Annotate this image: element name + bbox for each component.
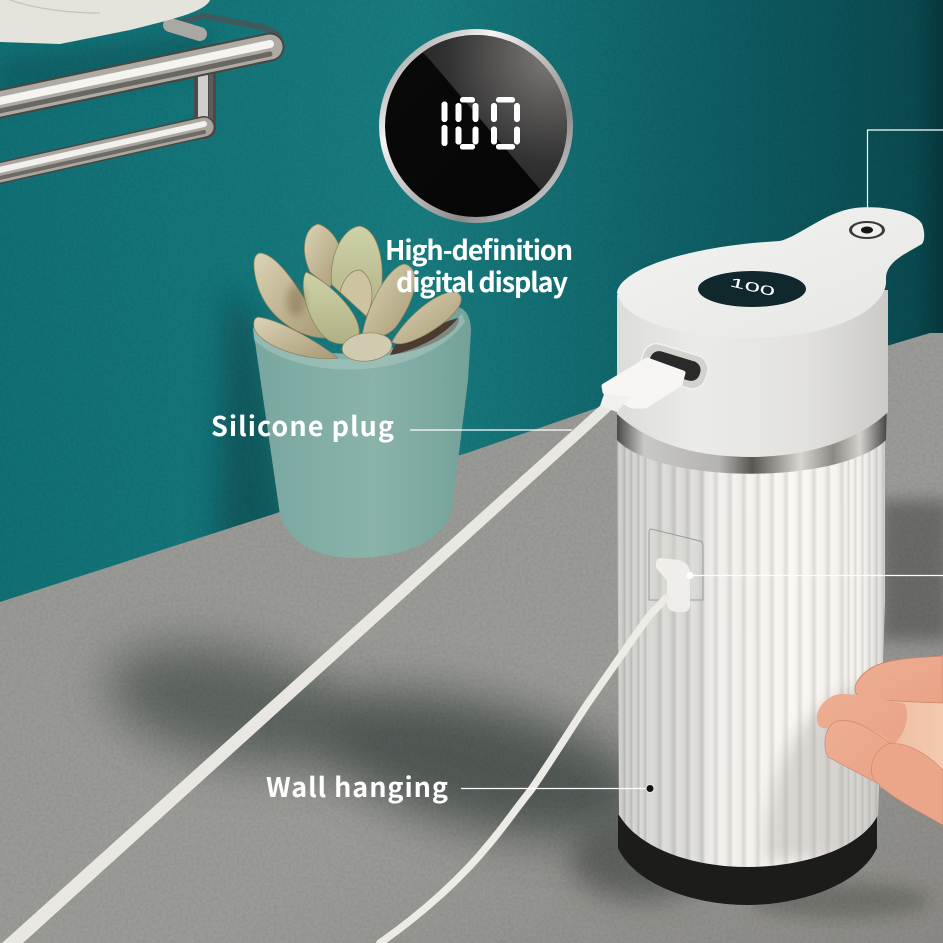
display badge bbox=[379, 29, 573, 223]
ribbed body bbox=[610, 430, 890, 870]
counter top bbox=[0, 333, 943, 943]
sensor ring bbox=[849, 221, 885, 239]
top display bbox=[698, 271, 806, 307]
soil bbox=[390, 318, 459, 355]
second finger bbox=[817, 694, 907, 745]
wall hook bbox=[658, 560, 688, 610]
floor shadow right of base bbox=[750, 882, 930, 918]
head top surface bbox=[617, 207, 924, 338]
hand bbox=[817, 655, 943, 825]
leaf: low left bbox=[254, 317, 338, 359]
black glass bbox=[385, 35, 567, 217]
top display: 100 bbox=[728, 274, 777, 299]
wall bbox=[0, 0, 943, 610]
dispenser bbox=[600, 207, 924, 905]
back bar bbox=[165, 16, 280, 40]
charging port bbox=[637, 340, 711, 392]
label: wall hanging bbox=[266, 766, 654, 805]
label: display: digital display bbox=[396, 261, 568, 300]
right counter shade bbox=[880, 500, 943, 640]
back stub bbox=[170, 25, 200, 34]
label: silicone plug: Silicone plug bbox=[211, 405, 394, 444]
leaf: front bbox=[303, 272, 359, 344]
pot shadow on wall bbox=[215, 285, 290, 560]
main cable bbox=[2, 404, 618, 943]
bracket bbox=[203, 70, 211, 128]
label: wall hanging: Wall hanging bbox=[266, 766, 448, 805]
pot bbox=[253, 307, 471, 558]
plug strain relief bbox=[600, 394, 630, 412]
callout: hook line bbox=[686, 572, 943, 579]
top finger bbox=[855, 656, 943, 703]
leaf: small centre bbox=[340, 270, 372, 316]
marker dot bbox=[646, 784, 654, 792]
leaf: back left bbox=[304, 224, 341, 287]
towel fold bbox=[10, 0, 100, 13]
second cable bbox=[380, 598, 666, 943]
wall hanging panel bbox=[649, 529, 703, 600]
leaf: centre green bbox=[331, 226, 382, 318]
towel bbox=[0, 0, 210, 44]
wall shadow of rail bbox=[0, 30, 210, 110]
leaf: pebble bbox=[341, 330, 393, 364]
metal bezel bbox=[379, 29, 573, 223]
reading: 100 bbox=[422, 82, 526, 166]
label: display: High-definition bbox=[385, 229, 573, 268]
label: display bbox=[385, 229, 573, 300]
lower bar bbox=[0, 124, 204, 179]
leaf: upper right bbox=[362, 264, 415, 338]
leaf: left bbox=[254, 253, 325, 338]
black base bbox=[618, 815, 877, 905]
towel rail bbox=[0, 16, 280, 179]
leader line bbox=[410, 429, 572, 431]
dispenser floor shadow left lobe bbox=[96, 625, 364, 785]
callout: sensor line bbox=[868, 130, 943, 208]
leaf shadow bbox=[287, 284, 305, 316]
leader line bbox=[461, 788, 646, 790]
head cylinder bbox=[617, 290, 888, 457]
upper bar bbox=[0, 44, 270, 112]
third finger bbox=[825, 720, 893, 782]
USB plug bbox=[604, 360, 683, 406]
metal ring bbox=[617, 400, 887, 474]
potted succulent bbox=[253, 224, 471, 558]
dispenser floor shadow right lobe bbox=[295, 663, 665, 867]
rim highlight bbox=[253, 313, 465, 370]
palm bbox=[860, 655, 943, 825]
hand shadow on body bbox=[765, 680, 890, 860]
fourth finger bbox=[871, 744, 943, 825]
glass sheen bbox=[422, 35, 567, 190]
leaf: far right bbox=[392, 292, 461, 344]
floor shadow under dispenser bbox=[570, 820, 710, 900]
